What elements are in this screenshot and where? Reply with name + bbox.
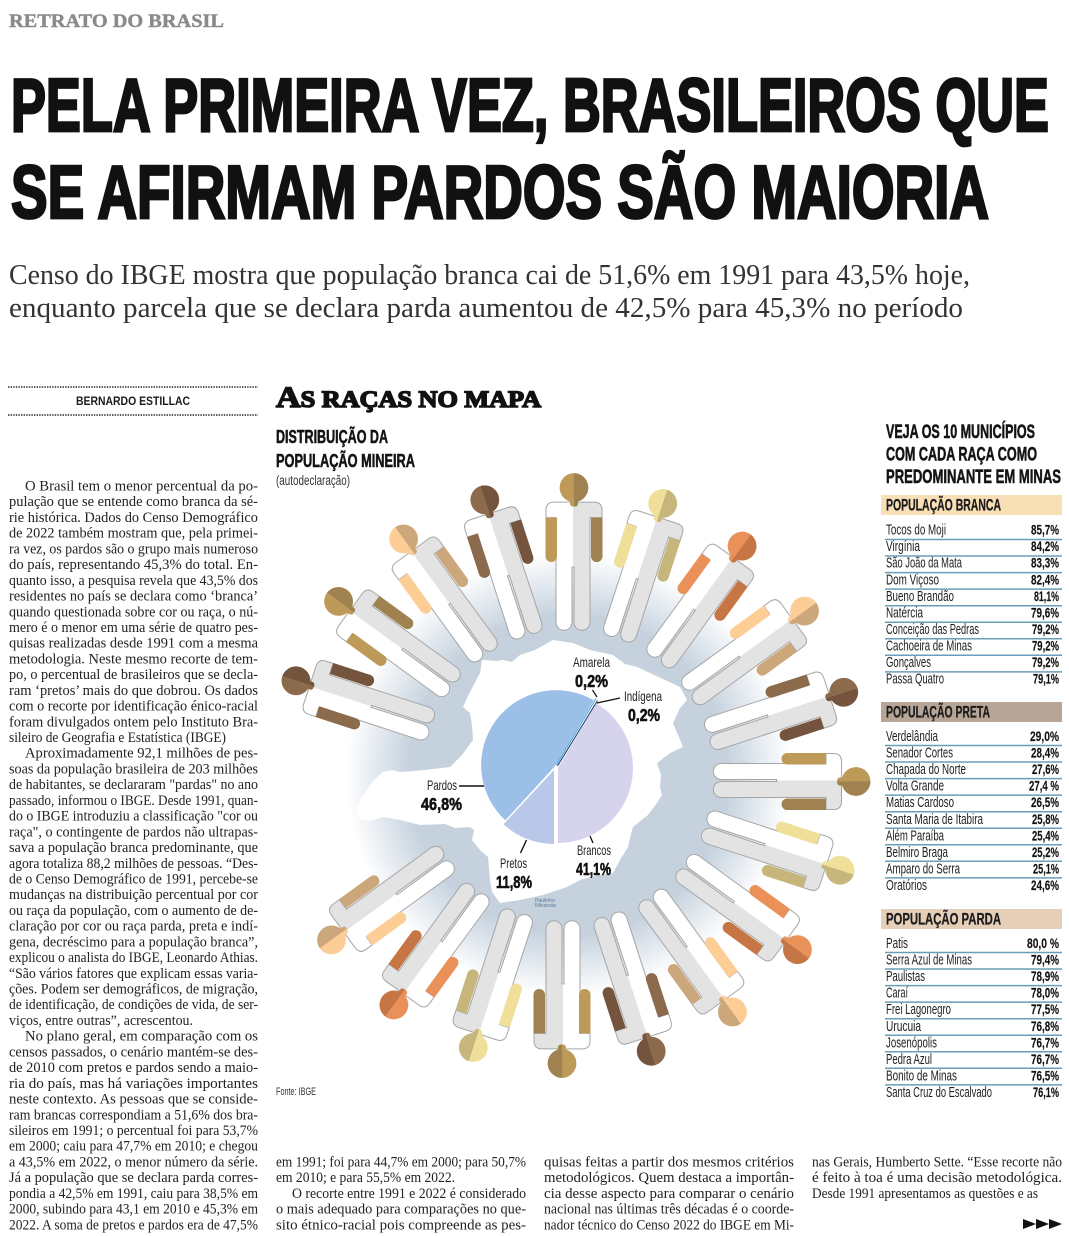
rankings heading [886, 421, 1061, 488]
article text: first column: ou raça da população, com o aumento de de- [9, 903, 258, 919]
municipality names: Virgínia [886, 539, 921, 555]
panel: população preta [881, 702, 1062, 894]
article text: first column: mero é o menor em uma série de quatro pes- [9, 620, 258, 636]
figure: brown 3 [273, 649, 441, 752]
illustrator credit: Miranda [535, 903, 557, 909]
title [11, 63, 1049, 234]
municipality names: Além Paraíba [886, 828, 945, 844]
municipality names: Tocos do Moji [886, 523, 946, 539]
article text: first column: claração por cor ou raça parda, preta e indí- [9, 919, 258, 935]
band: população branca: POPULAÇÃO BRANCA [886, 494, 1001, 514]
article text: first column: agora totaliza 88,2 milhões de pessoas. “Des- [9, 856, 258, 872]
label: pretos: 11,8% [496, 872, 532, 892]
article text: fourth column: é feito à toa é uma decisão metodológica. [812, 1170, 1062, 1186]
article text: first column: raça", o contingente de pardos não ultrapas- [9, 824, 258, 840]
percentages [1031, 522, 1059, 687]
municipality names: Amparo do Serra [886, 861, 961, 877]
label: indígena [597, 688, 662, 725]
article text: first column: viços, entre outras”, acrescentou. [9, 1013, 193, 1029]
illustrator credit: Paulinho [535, 898, 555, 904]
municipality names: Volta Grande [886, 779, 944, 795]
article text: first column: ções. Podem ser demográficos, de migração, [9, 982, 258, 998]
label: amarela: 0,2% [575, 671, 608, 691]
slice: pretos [504, 770, 554, 844]
figure: peach 3 [303, 833, 464, 971]
municipality names [886, 523, 979, 688]
percentages: 29,0% [1030, 728, 1059, 744]
municipality names: Matias Cardoso [886, 795, 954, 811]
pie chart [481, 690, 633, 844]
figure: gold 1 [546, 473, 602, 630]
municipality names: Conceição das Pedras [886, 622, 979, 638]
article text: first column: explicou o analista do IBGE, Leonardo Athias. [9, 950, 258, 966]
subtitle: Censo do IBGE mostra que população branca cai de 51,6% em 1991 para 43,5% hoje, [9, 259, 970, 291]
article text: first column: de 2010 com pretos e pardos sendo a maio- [9, 1060, 258, 1076]
source note: Fonte: IBGE [276, 1086, 316, 1098]
figure: yellow 3 [442, 903, 545, 1070]
label: brancos [576, 836, 611, 879]
pie labels [421, 654, 662, 892]
article text: first column: metodologia. Neste mesmo recorte de tem- [9, 651, 258, 667]
municipality names: Paulistas [886, 969, 925, 985]
article text: first column: de habitantes, se declararam "pardas" no ano [9, 777, 258, 793]
article text: first column: foram divulgados ontem pelo Instituto Bra- [9, 714, 258, 730]
chart subtitle: DISTRIBUIÇÃO DA [276, 426, 388, 447]
article text: first column: em 2000; caiu para 47,7% em 2010; e chegou [9, 1139, 258, 1155]
slice: brancos [558, 703, 633, 843]
municipality names: Bueno Brandão [886, 589, 954, 605]
article text: first column: residentes no país se declara como ‘branca’ [9, 588, 258, 604]
article text: first column: quisas realizadas desde 1991 com a mesma [9, 636, 259, 652]
article text: first column: pulação que se entende como branca da sé- [9, 494, 258, 510]
slice: pardos [481, 690, 594, 820]
article text: first column: ra vez, os pardos são o grupo mais numeroso [9, 541, 258, 557]
label: indígena: 0,2% [628, 705, 660, 725]
municipality names: Pedra Azul [886, 1052, 932, 1068]
band: população parda: POPULAÇÃO PARDA [886, 908, 1001, 928]
article text: first column: sileiro de Geografia e Estatística (IBGE) [9, 730, 226, 746]
article text: first column: com o recorte por identificação énico-racial [9, 699, 258, 715]
municipality names: Oratórios [886, 878, 927, 894]
municipality names: Cachoeira de Minas [886, 638, 972, 654]
article text: first column [9, 478, 259, 1233]
article text: first column: Já a população que se declara parda corres- [9, 1170, 258, 1186]
article text: first column: 2000, subindo para 43,1 em 2010 e 45,3% em [9, 1202, 258, 1218]
label: pardos: 46,8% [421, 794, 462, 814]
chart subtitle: (autodeclaração) [276, 473, 350, 488]
article text: first column: pondia a 42,5% em 1991, caiu para 38,5% em [9, 1186, 258, 1202]
article text: first column: passado, informou o IBGE. Desde 1991, quan- [9, 793, 258, 809]
figure: brown 4 [453, 477, 556, 644]
article text: second column: em 2010; e para 55,5% em 2022. [276, 1170, 455, 1186]
band: população preta: POPULAÇÃO PRETA [886, 702, 990, 722]
municipality names: Frei Lagonegro [886, 1002, 951, 1018]
icon: continuation arrows [1023, 1219, 1062, 1229]
figure: brown 1 [699, 661, 866, 764]
label: amarela [573, 654, 610, 697]
municipality names: Bonito de Minas [886, 1068, 957, 1084]
municipality names: Patis [886, 936, 908, 952]
article text: first column: 2022. A soma de pretos e pardos era de 47,5% [9, 1217, 258, 1233]
article text: first column: No plano geral, em comparação com os [25, 1029, 258, 1045]
chart subtitle: POPULAÇÃO MINEIRA [276, 450, 415, 471]
municipality names: Natércia [886, 605, 924, 621]
illustrator credit [535, 898, 557, 909]
figure: yellow 2 [695, 799, 863, 902]
municipality names: Verdelândia [886, 729, 939, 745]
municipality names: Dom Viçoso [886, 572, 939, 588]
article text: first column: a 43,5% em 2022, o menor número da série. [9, 1154, 258, 1170]
article text: second column: sito étnico-racial pois compreende as pes- [276, 1217, 526, 1233]
figure: gold 2 [713, 753, 870, 810]
article text: first column: quanto isso, a pesquisa revela que 43,5% dos [9, 573, 258, 589]
article text: first column: de 2022 também mostram que, pela primei- [9, 526, 258, 542]
article text: first column: do o IBGE introduziu a classificação "cor ou [9, 809, 258, 825]
article text: first column: ram brancas correspondiam a 51,6% dos bra- [9, 1107, 258, 1123]
article text: third column: quisas feitas a partir dos mesmos critérios [544, 1154, 794, 1170]
figure: gold 3 [534, 921, 590, 1078]
section label: RETRATO DO BRASIL [9, 11, 224, 32]
panel: população branca [881, 494, 1062, 688]
figure: brown 2 [580, 907, 683, 1074]
article text: first column: Aproximadamente 92,1 milhões de pes- [25, 746, 258, 762]
article text: first column: ria do país, mas há variações importantes [9, 1076, 258, 1092]
article text: third column: cia desse aspecto para comparar o cenário [544, 1186, 794, 1202]
label: pardos: Pardos [427, 777, 457, 793]
municipality names: Santa Maria de Itabira [886, 812, 984, 828]
municipality names [886, 729, 984, 894]
article text: second column [276, 1154, 526, 1233]
figure: orange 3 [362, 873, 501, 1033]
label: pretos [496, 840, 532, 892]
map of Minas Gerais [357, 640, 687, 903]
label: brancos: 41,1% [576, 859, 611, 879]
figure: gold 4 [310, 570, 471, 708]
figure: peach 4 [372, 511, 511, 671]
municipality names: São João da Mata [886, 556, 963, 572]
figure: yellow 1 [591, 481, 694, 648]
article text: first column: sileiros em 1991; o percentual foi para 53,7% [9, 1123, 258, 1139]
article text: second column: O recorte entre 1991 e 2022 é considerado [292, 1186, 526, 1202]
chart subtitle [276, 426, 415, 488]
municipality names: Santa Cruz do Escalvado [886, 1085, 992, 1101]
article text: first column: neste contexto. As pessoas que se conside- [9, 1092, 258, 1108]
percentages [1029, 728, 1059, 893]
label: pretos: Pretos [500, 855, 527, 871]
article text: first column: mudanças na distribuição percentual por cor [9, 887, 258, 903]
article text: second column: em 1991; foi para 44,7% em 2000; para 50,7% [276, 1154, 526, 1170]
municipality names [886, 936, 992, 1101]
byline: BERNARDO ESTILLAC [76, 394, 190, 408]
figure: orange 1 [635, 518, 774, 678]
label: amarela: Amarela [573, 654, 610, 670]
article text: fourth column [812, 1154, 1062, 1202]
background: radial shading [346, 553, 790, 997]
figure: orange 2 [665, 843, 826, 981]
municipality names: Senador Cortes [886, 746, 953, 762]
municipality names: Passa Quatro [886, 672, 944, 688]
article text: fourth column: Desde 1991 apresentamos as questões e as [812, 1186, 1038, 1202]
article text: first column: do país, representando 45,3% do total. En- [9, 557, 258, 573]
article text: third column: nador técnico do Censo 2022 do IBGE em Mi- [544, 1217, 794, 1233]
article text: first column: censos passados, o cenário mantém-se des- [9, 1044, 258, 1060]
municipality names: Gonçalves [886, 655, 931, 671]
article text: first column: O Brasil tem o menor percentual da po- [25, 478, 258, 494]
article text: first column: gena, decréscimo para a população branca”, [9, 934, 258, 950]
municipality names: Caraí [886, 986, 908, 1002]
label: indígena: Indígena [624, 688, 662, 704]
subtitle [9, 259, 970, 324]
municipality names: Chapada do Norte [886, 762, 966, 778]
subtitle: enquanto parcela que se declara parda aumentou de 42,5% para 45,3% no período [9, 292, 963, 324]
figure: peach 1 [672, 580, 833, 718]
municipality names: Belmiro Braga [886, 845, 949, 861]
figure: peach 2 [625, 880, 764, 1040]
municipality names: Urucuia [886, 1019, 922, 1035]
article text: first column: po, o percentual de brasileiros que se decla- [9, 667, 258, 683]
article text: second column: o mais adequado para comparações no que- [276, 1202, 526, 1218]
article text: first column: ram ‘pretos’ mais do que dobrou. Os dados [9, 683, 258, 699]
article text: first column: quando questionada sobre cor ou raça, o nú- [9, 604, 258, 620]
article text: first column: “São vários fatores que explicam essas varia- [9, 966, 258, 982]
label: pardos [421, 777, 484, 814]
article text: third column: metodológicos. Quem destaca a importân- [544, 1170, 794, 1186]
article text: first column: sava a população branca predominante, que [9, 840, 258, 856]
percentages [1027, 935, 1059, 1100]
label: brancos: Brancos [577, 842, 611, 858]
infographic heading: AS RAÇAS NO MAPA [276, 381, 541, 414]
municipality names: Josenópolis [886, 1035, 937, 1051]
slice: indígena [558, 700, 598, 766]
article text: third column [544, 1154, 794, 1233]
article text: third column: nacional nas últimas três décadas é o coorde- [544, 1202, 794, 1218]
article text: first column: soas da população brasileira de 203 milhões [9, 762, 258, 778]
article text: first column: rie histórica. Dados do Censo Demográfico [9, 510, 258, 526]
municipality names: Serra Azul de Minas [886, 953, 972, 969]
panel: população parda [881, 908, 1062, 1101]
article text: first column: de identificação, de condições de vida, de ser- [9, 997, 258, 1013]
article text: first column: de o Censo Demográfico de 1991, percebe-se [9, 872, 258, 888]
people ring [273, 473, 870, 1078]
slice: amarela [556, 698, 596, 765]
